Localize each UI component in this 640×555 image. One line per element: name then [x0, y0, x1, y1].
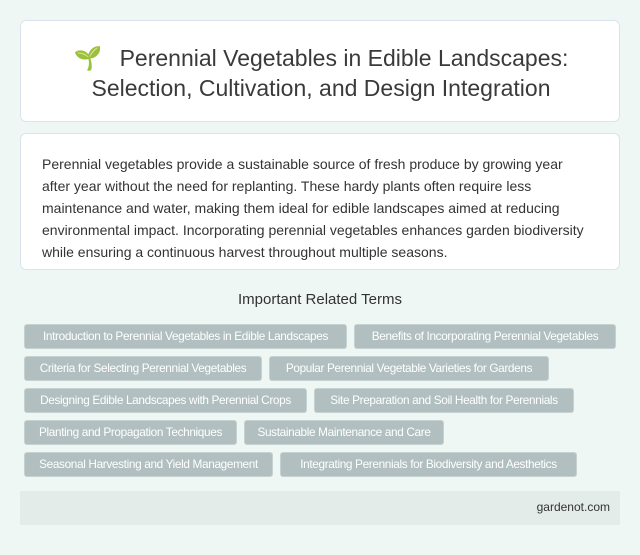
tag: Popular Perennial Vegetable Varieties for Gardens [286, 361, 532, 375]
title: Selection, Cultivation, and Design Integration [91, 75, 550, 101]
tag: Planting and Propagation Techniques [39, 425, 222, 439]
tag: Site Preparation and Soil Health for Perennials [330, 393, 558, 407]
tag: Benefits of Incorporating Perennial Vegetables [372, 329, 598, 343]
tag [24, 324, 347, 349]
tag: Designing Edible Landscapes with Perennial Crops [40, 393, 291, 407]
tag: Sustainable Maintenance and Care [257, 425, 431, 439]
footer [20, 491, 620, 525]
description panel [20, 133, 620, 270]
tag: Criteria for Selecting Perennial Vegetables [40, 361, 246, 375]
tag [280, 452, 577, 477]
tag: Introduction to Perennial Vegetables in Edible Landscapes [43, 329, 328, 343]
tag: Seasonal Harvesting and Yield Management [39, 457, 258, 471]
tag [24, 356, 262, 381]
title [74, 45, 568, 101]
footer text: gardenot.com [537, 500, 610, 514]
title card [20, 20, 620, 122]
tag [244, 420, 444, 445]
tag [314, 388, 574, 413]
icon: seedling: 🌱 [74, 45, 102, 71]
tag [24, 388, 307, 413]
description text: Perennial vegetables provide a sustainable source of fresh produce by growing year after year without the need for replanting. These hardy plants often require less maintenance and water, making them ideal for edible landscapes aimed at reducing environmental impact. Incorporating perennial vegetables enhances garden biodiversity while ensuring a continuous harvest throughout multiple seasons. [42, 156, 584, 260]
tag [24, 420, 237, 445]
heading: related terms: Important Related Terms [238, 291, 402, 308]
tag [269, 356, 549, 381]
tag: Integrating Perennials for Biodiversity and Aesthetics [300, 457, 557, 471]
title: Perennial Vegetables in Edible Landscapes: [120, 45, 568, 71]
tag [354, 324, 616, 349]
tag [24, 452, 273, 477]
